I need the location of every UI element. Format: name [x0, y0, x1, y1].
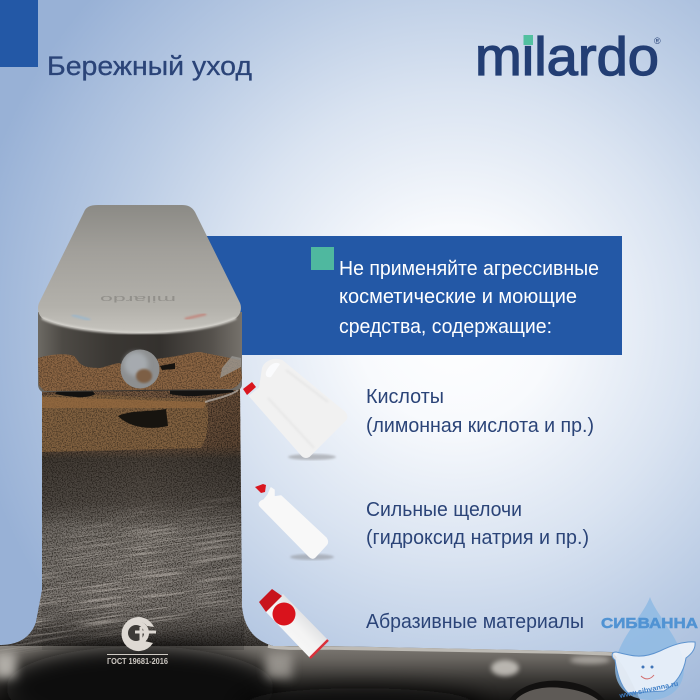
title: Бережный уход — [47, 51, 252, 81]
warning text: косметические и моющие — [339, 286, 577, 308]
text: alkalis: Сильные щелочи — [366, 499, 522, 521]
light patch beside neck — [266, 652, 292, 678]
dark shadow at faucet foot — [5, 646, 275, 700]
icon: bottle — [255, 484, 334, 560]
text: acids: Кислоты — [366, 386, 444, 408]
base top highlight — [268, 646, 612, 654]
corner accent block — [0, 0, 38, 67]
water drop — [615, 597, 684, 700]
warning text — [339, 258, 599, 338]
watermark: Сибванна logo — [601, 597, 698, 700]
bathtub mascot — [612, 642, 695, 693]
faucet photo illustration — [0, 205, 700, 700]
text: alkalis — [366, 499, 589, 549]
cold mark — [72, 315, 90, 320]
brand logo: milardo: milardo — [475, 27, 659, 87]
watermark wordmark: СИБВАННА — [601, 615, 698, 632]
text: acids — [366, 386, 594, 437]
text: abrasives: Абразивные материалы — [366, 611, 584, 633]
base reflections on right — [491, 660, 519, 676]
light patch at far left of base — [0, 652, 16, 678]
icon: abrasive tube — [259, 589, 328, 658]
brand logo: milardo: ® — [654, 36, 661, 46]
GOST certification mark: ГОСТ 19681-2016 — [107, 657, 169, 666]
water droplet — [120, 350, 160, 388]
GOST certification mark — [107, 617, 169, 666]
hot mark — [185, 314, 206, 319]
text: acids: (лимонная кислота и пр.) — [366, 415, 594, 437]
mirrored brand mark on handle: milardo — [100, 294, 176, 304]
warning text: Не применяйте агрессивные — [339, 258, 599, 280]
icon: canister — [243, 360, 346, 460]
collar with rust band — [38, 312, 242, 392]
lever handle — [38, 205, 241, 333]
panel: warning banner — [200, 236, 622, 355]
rust on body — [42, 394, 208, 452]
text: alkalis: (гидроксид натрия и пр.) — [366, 527, 589, 549]
watermark url: www.sibvanna.ru — [618, 681, 679, 700]
faucet body and base — [0, 388, 700, 700]
dark shadow under base — [235, 688, 485, 700]
teal marker square — [311, 247, 334, 270]
warning text: средства, содержащие: — [339, 316, 552, 338]
drain opening — [512, 680, 602, 698]
